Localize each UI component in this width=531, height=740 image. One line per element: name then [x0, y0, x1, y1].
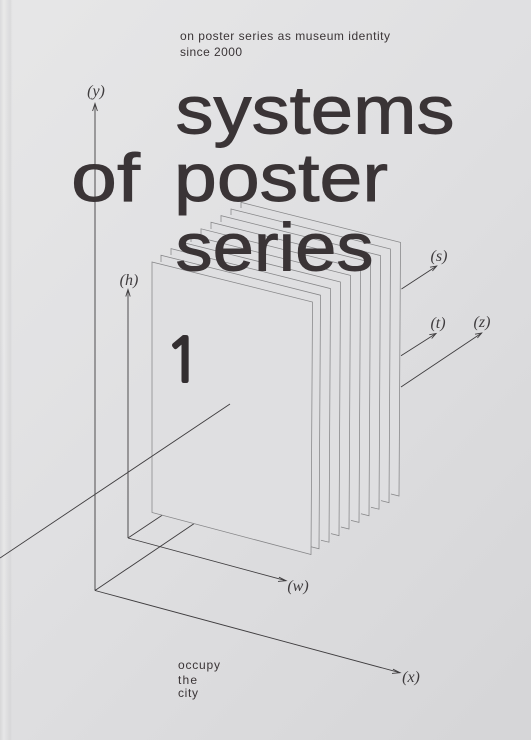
publisher name: [178, 658, 220, 700]
y axis: [93, 104, 97, 590]
subtitle: [180, 29, 390, 59]
axis labels: (w): [287, 578, 309, 595]
subtitle: since 2000: [180, 45, 242, 59]
z axis arrow: [401, 333, 482, 387]
long diagonal line: [0, 404, 230, 558]
inner depth line: [128, 514, 164, 538]
axis lines: [93, 104, 400, 673]
h axis: [126, 290, 130, 538]
volume number: 1: [165, 330, 201, 390]
main title: series: [176, 210, 374, 286]
w axis: [128, 538, 286, 581]
axis labels: [87, 83, 490, 686]
publisher name: occupy: [178, 658, 220, 672]
axis labels: (t): [430, 315, 446, 332]
front sheet: [152, 262, 312, 554]
axis labels: (x): [402, 669, 420, 686]
publisher name: the: [178, 673, 197, 687]
axis labels: (h): [120, 272, 138, 289]
publisher name: city: [178, 686, 198, 700]
main title: [71, 72, 454, 286]
main title: of: [71, 140, 140, 216]
axis labels: (z): [474, 314, 490, 331]
stack of ten poster sheets: [152, 202, 400, 554]
main title: systems: [176, 72, 454, 148]
s axis arrow: [402, 266, 437, 289]
depth axis base line: [95, 523, 195, 590]
t axis arrow: [401, 334, 436, 356]
axis labels: (y): [87, 83, 105, 100]
axis labels: (s): [431, 248, 447, 265]
emerging axis arrows: [401, 266, 482, 387]
x axis: [95, 590, 400, 673]
subtitle: on poster series as museum identity: [180, 29, 390, 43]
main title: poster: [174, 140, 388, 216]
